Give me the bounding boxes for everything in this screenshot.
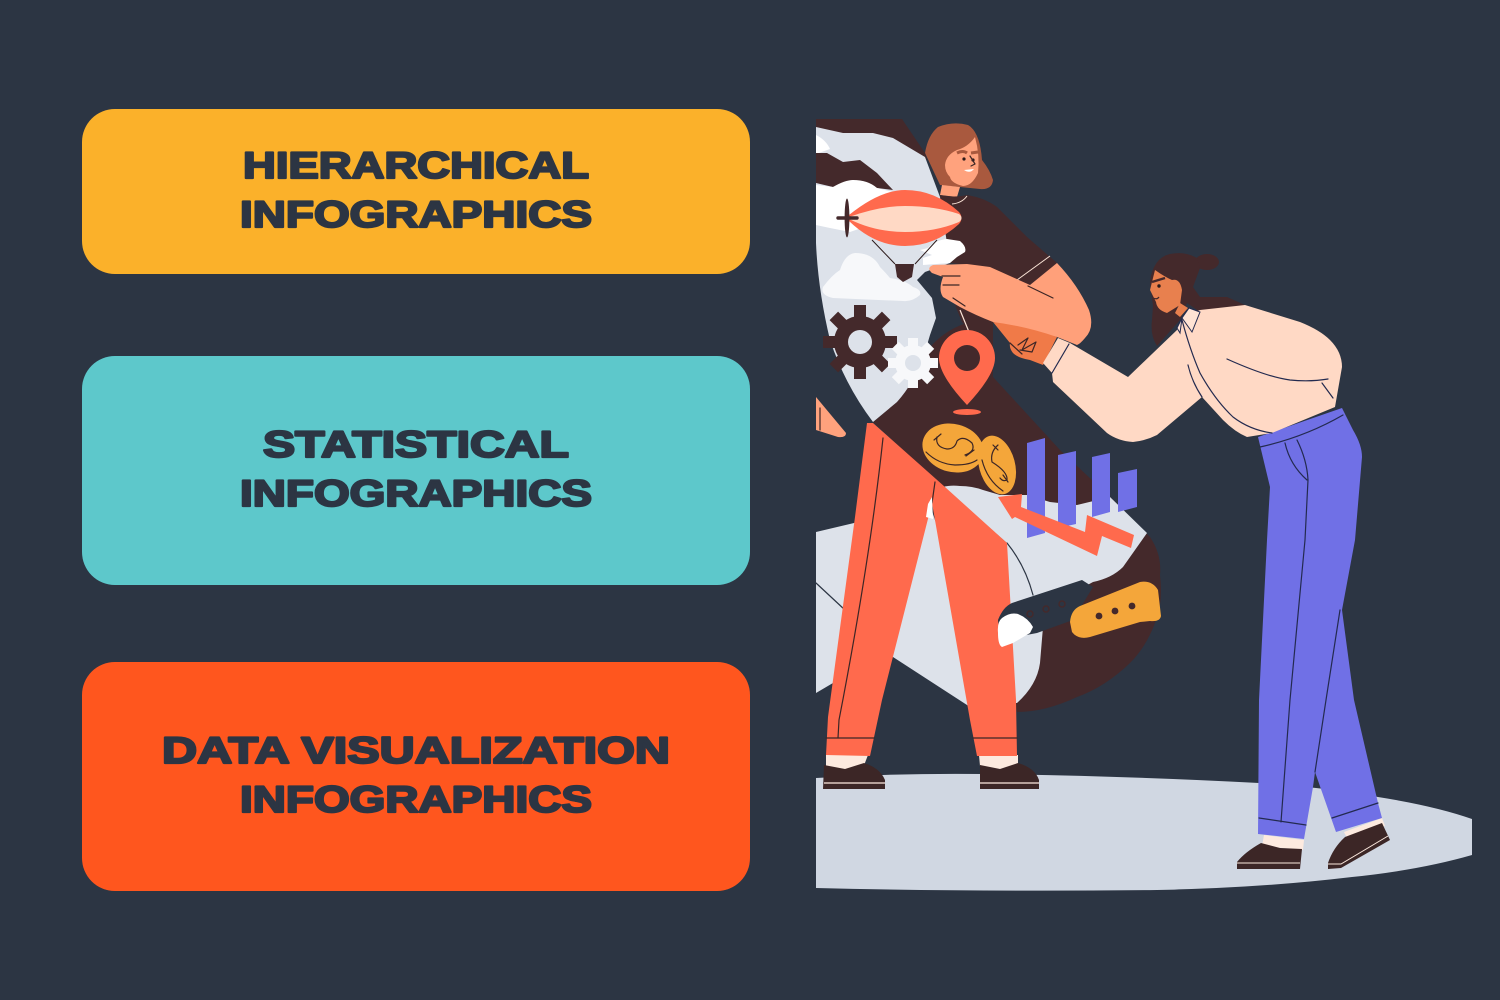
panel: statistical infographics: [82, 356, 750, 585]
ribbon: light middle section: [943, 486, 1147, 703]
standing woman: head and hair: [925, 123, 993, 197]
leaning woman: socks and shoes: [1237, 818, 1390, 869]
leaning woman: collar: [1177, 308, 1200, 333]
leaning woman: blouse: [1043, 305, 1342, 442]
heading: hierarchical infographics: HIERARCHICAL: [243, 144, 589, 186]
coins with dollar signs: [917, 417, 1022, 499]
airship: [838, 190, 962, 282]
dark patch under arm: [955, 305, 993, 345]
leaning woman: purple trousers: [1258, 408, 1382, 839]
ribbon: dark top: [816, 119, 927, 160]
heading: hierarchical infographics: INFOGRAPHICS: [240, 193, 592, 235]
illustration: two people with data ribbon: [816, 119, 1472, 891]
cloud: white behind blimp: [816, 180, 893, 232]
panel: hierarchical infographics: [82, 109, 750, 274]
strap: navy band with dots: [998, 580, 1093, 640]
standing woman: forearm and hand: [929, 263, 1091, 345]
bar chart icon: [1027, 438, 1137, 538]
heading: data visualization infographics: INFOGRAPHICS: [240, 778, 592, 820]
ribbon: fold curve: [1007, 543, 1033, 595]
cloud: white beside blimp: [920, 239, 965, 265]
icon: white gear: [888, 338, 938, 388]
ribbon: light upper section: [816, 127, 950, 422]
heading: statistical infographics: STATISTICAL: [263, 423, 569, 465]
speech bubble with dots: [1070, 582, 1161, 638]
panel: data visualization infographics: [82, 662, 750, 891]
cloud: large soft cloud: [822, 253, 920, 301]
standing woman: dark tee: [940, 195, 1057, 285]
ribbon: lower light section: [816, 505, 975, 712]
standing woman: orange trousers: [826, 423, 1017, 756]
ground shadow: [816, 774, 1472, 891]
leaning woman: hair: [1150, 253, 1245, 346]
ribbon: dark wave: [816, 153, 893, 190]
leaning woman: face: [1150, 270, 1188, 317]
ribbon: top-left cloud patch: [816, 135, 830, 154]
leaning woman: hand: [993, 322, 1057, 365]
map pin icon: [939, 310, 995, 415]
ribbon: thin fold line: [816, 583, 845, 610]
heading: statistical infographics: INFOGRAPHICS: [240, 472, 592, 514]
heading: data visualization infographics: DATA VISUALIZATION: [162, 729, 670, 771]
icon: small hand at left edge: [816, 397, 846, 437]
standing woman: socks and shoes: [823, 755, 1039, 789]
cloud: white blob on strap: [998, 614, 1033, 647]
zigzag arrow: [998, 494, 1134, 556]
icon: dark gear: [823, 305, 897, 379]
ribbon: dark lower band: [873, 322, 1161, 712]
